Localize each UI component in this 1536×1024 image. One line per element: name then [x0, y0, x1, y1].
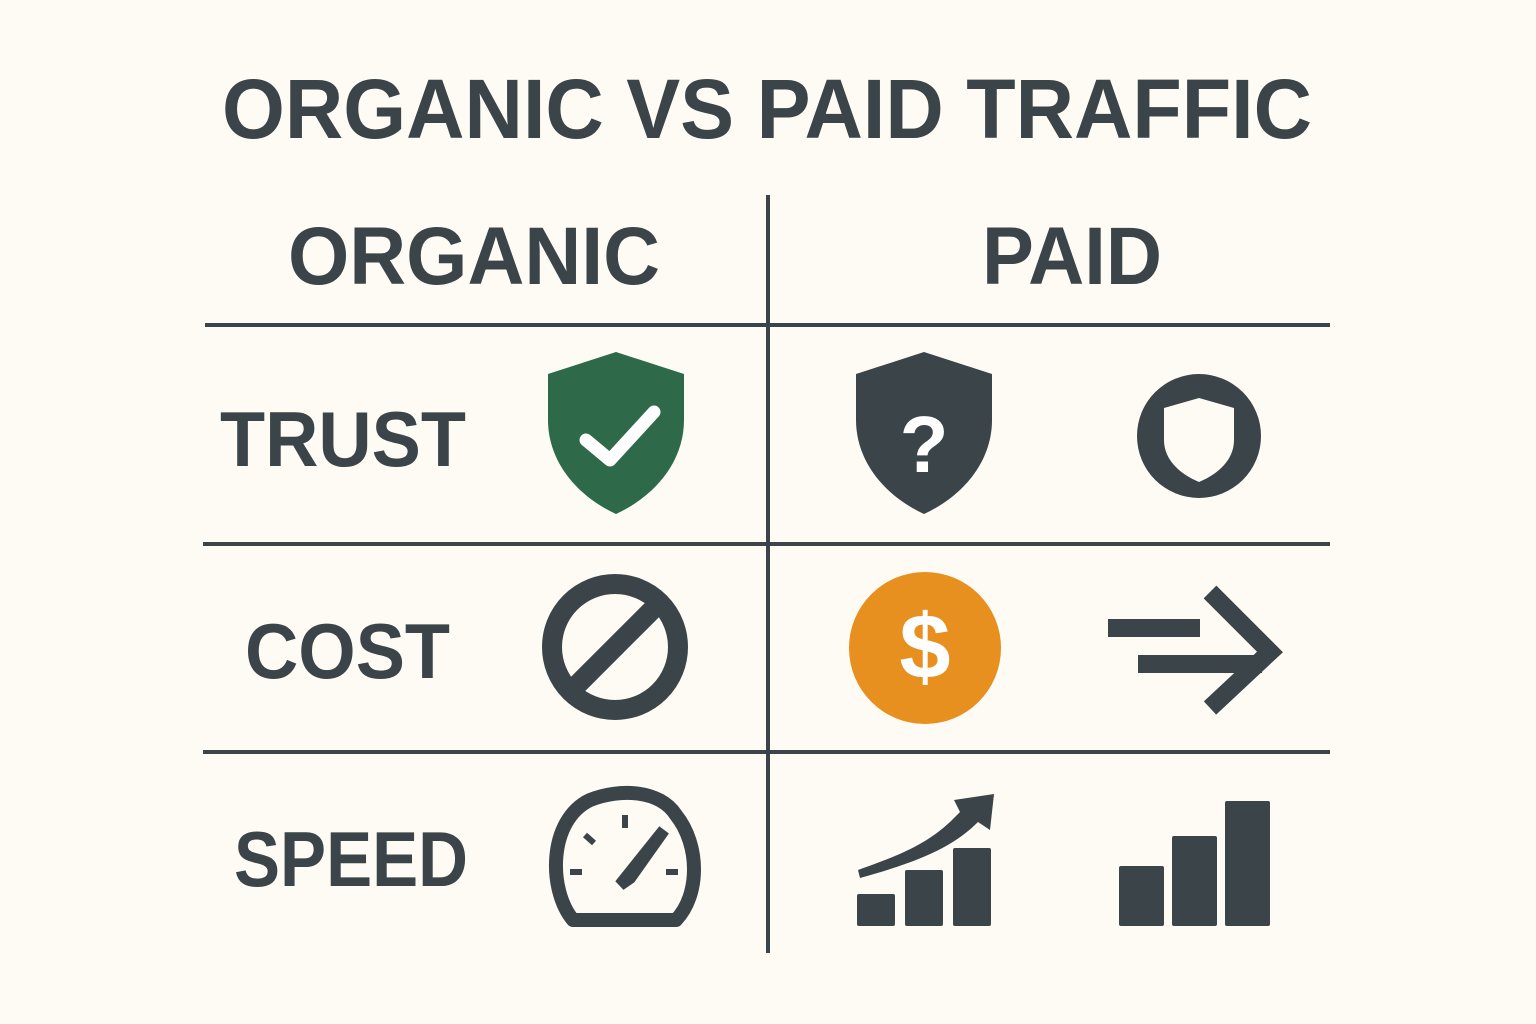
icon: orange dollar coin: $ — [899, 596, 951, 698]
title: ORGANIC VS PAID TRAFFIC — [222, 62, 1312, 156]
icon: no-cost circle — [552, 584, 678, 710]
icon: speedometer — [556, 793, 694, 920]
label: speed: SPEED — [234, 815, 468, 903]
icon: shield question: ? — [900, 400, 948, 489]
icon: growth chart — [857, 794, 994, 926]
label: cost: COST — [245, 607, 450, 695]
icon: bar chart — [1119, 801, 1270, 926]
icon: arrow right — [1108, 592, 1270, 708]
header: organic: ORGANIC — [288, 211, 660, 302]
icon: green shield check — [548, 352, 684, 514]
icon: circle shield — [1137, 374, 1261, 498]
icon: orange dollar coin — [849, 572, 1001, 724]
icon: shield question — [856, 352, 992, 514]
label: trust: TRUST — [220, 395, 466, 483]
header: paid: PAID — [982, 211, 1162, 302]
